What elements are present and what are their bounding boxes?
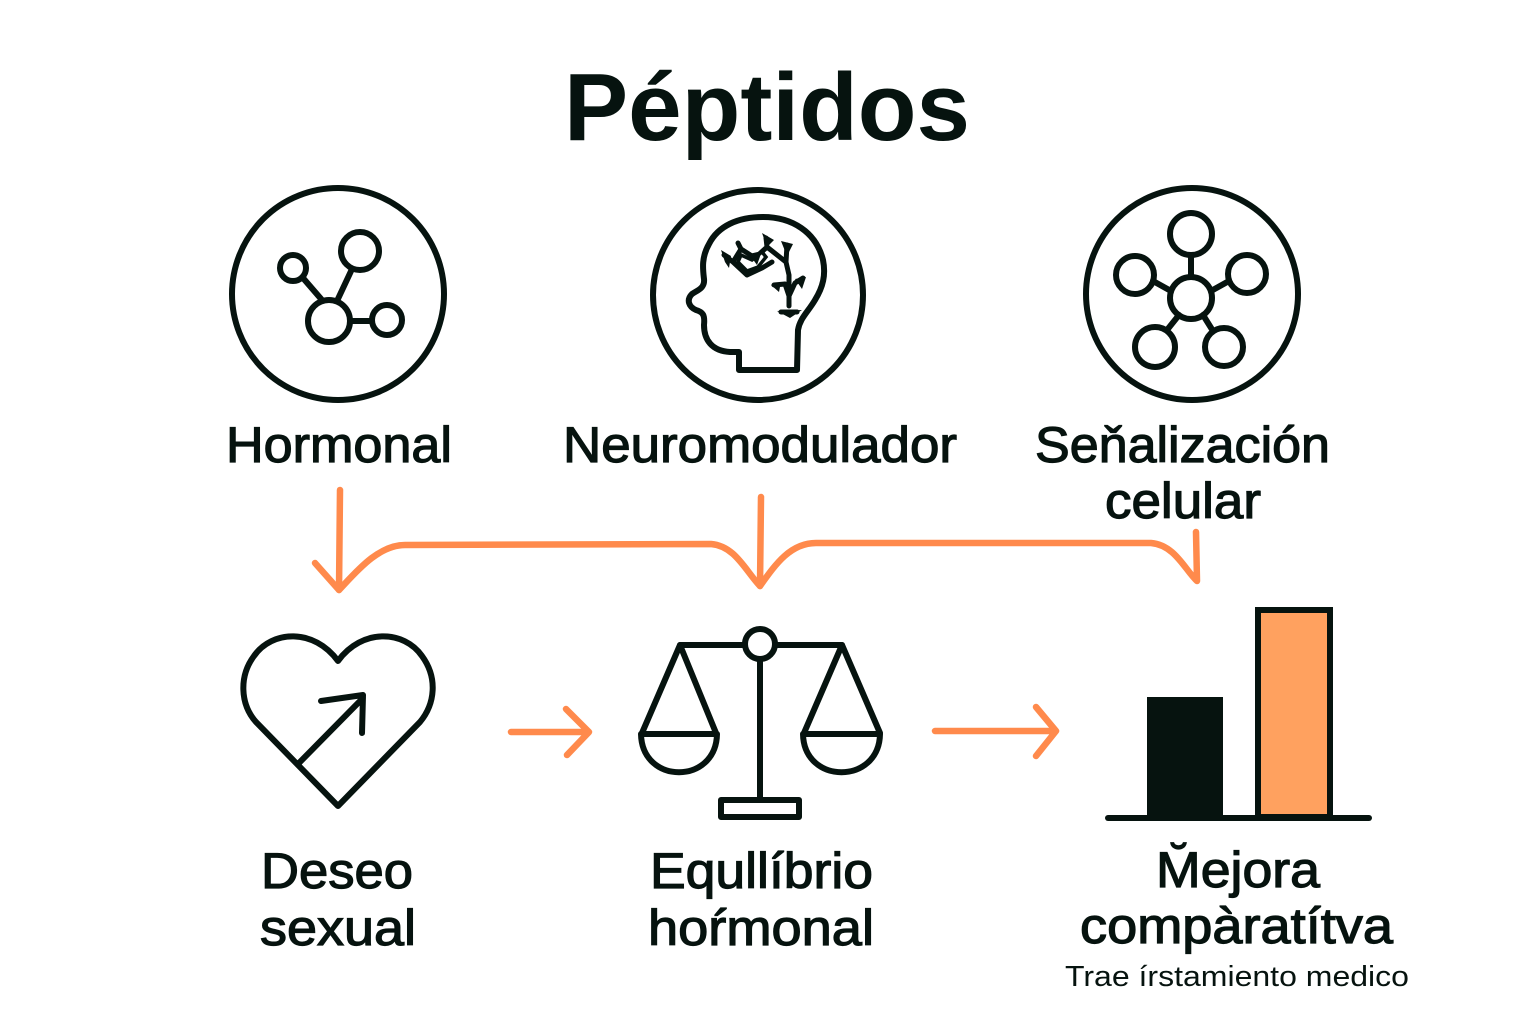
caption: Trae írstamiento medico xyxy=(1065,961,1409,993)
panel: mejora comparativa xyxy=(1065,610,1409,993)
label: Señalización celular: celular xyxy=(1105,473,1261,529)
icon: balance scale xyxy=(641,629,880,817)
arrow: equilibrio to mejora xyxy=(935,707,1056,756)
panel: equilibrio hormonal xyxy=(641,629,880,956)
label: Deseo sexual: sexual xyxy=(260,900,416,956)
label: Mejora comparativa: compàratítva xyxy=(1080,898,1393,954)
label: Equilibrio hormonal xyxy=(648,843,874,956)
panel: hormonal xyxy=(226,188,452,473)
arrow: deseo to equilibrio xyxy=(511,709,589,755)
label: Deseo sexual: Deseo xyxy=(261,843,413,899)
arrows: connecting brace xyxy=(315,490,1197,590)
label: Mejora comparativa: M̆ejora xyxy=(1156,842,1320,898)
bar chart xyxy=(1108,610,1369,818)
icon: head with neural branches xyxy=(653,190,863,400)
label: Equilibrio hormonal: Equllíbrio xyxy=(650,843,873,899)
title: Péptidos xyxy=(564,54,970,161)
label: Señalización celular: Seňalización xyxy=(1035,417,1330,473)
label: Equilibrio hormonal: hoŕmonal xyxy=(648,900,874,956)
icon: heart with up arrow xyxy=(243,636,433,806)
icon: network in circle xyxy=(1086,188,1298,400)
label: Mejora comparativa xyxy=(1080,842,1393,954)
label: Señalización celular xyxy=(1035,417,1330,529)
panel: senalizacion celular xyxy=(1035,188,1330,529)
label: Hormonal: Hormonal xyxy=(226,417,452,473)
panel: neuromodulador xyxy=(563,190,957,473)
panel: deseo sexual xyxy=(243,636,433,956)
label: Deseo sexual xyxy=(260,843,416,956)
icon: molecule in circle xyxy=(232,188,444,400)
label: Neuromodulador: Neuromodulador xyxy=(563,417,957,473)
